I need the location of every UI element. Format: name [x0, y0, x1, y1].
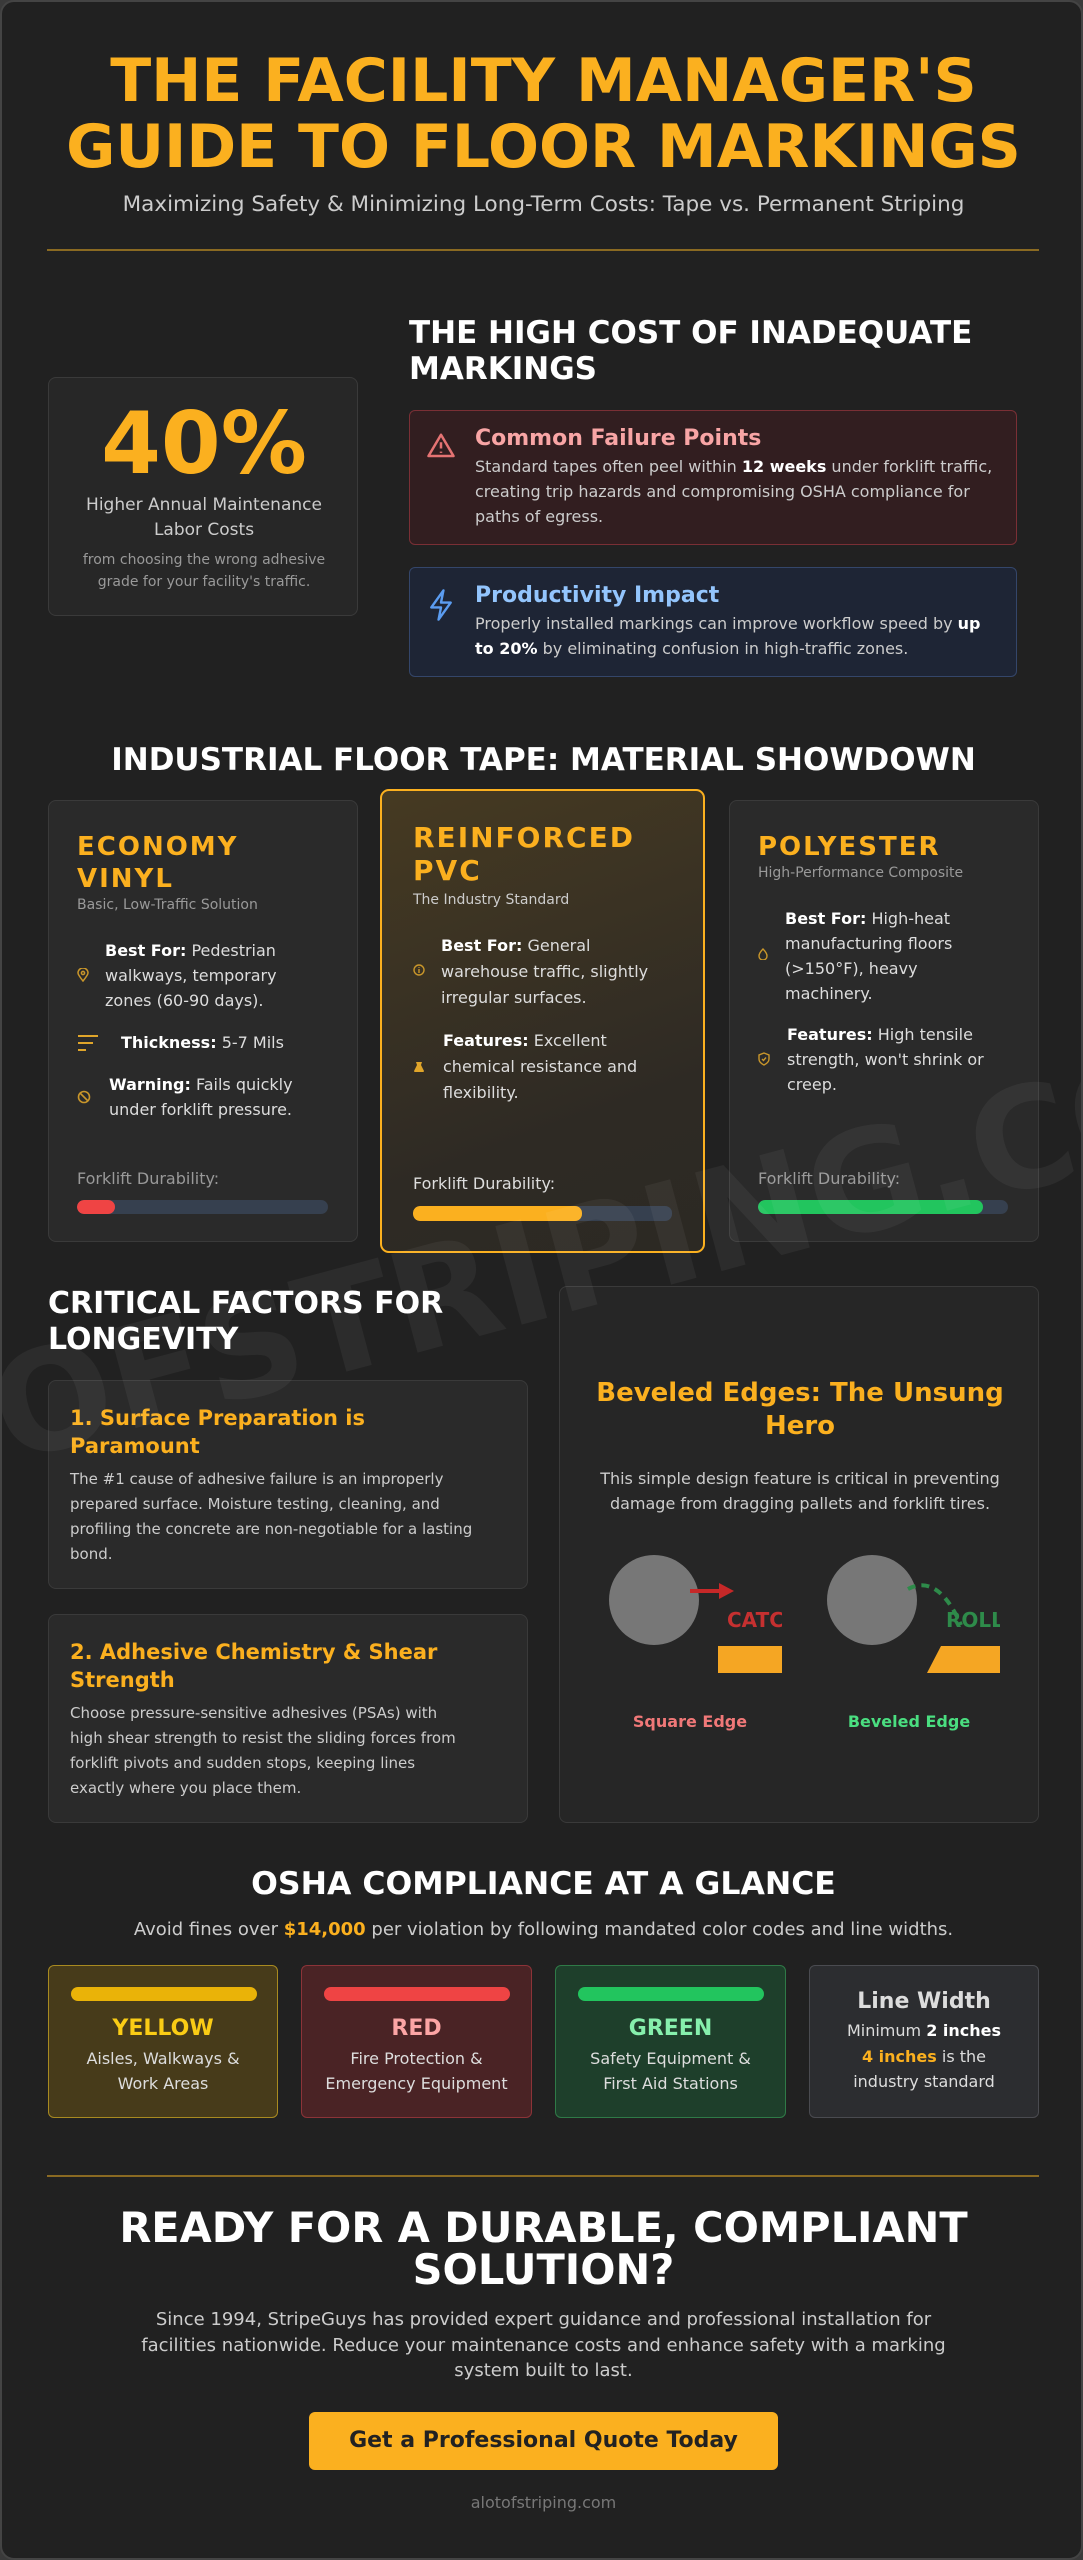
panel title	[596, 1378, 1004, 1441]
color code: green: GREEN	[629, 2016, 712, 2041]
item: features: Features: Excellent	[443, 1031, 607, 1050]
color code: yellow: Work Areas	[118, 2074, 208, 2093]
item: features: chemical resistance and	[443, 1057, 637, 1076]
item: features: flexibility.	[443, 1083, 519, 1102]
factor text: forklift pivots and sudden stops, keeping lines	[70, 1754, 415, 1772]
panel: economy vinyl	[48, 800, 358, 1242]
title: GUIDE TO FLOOR MARKINGS	[66, 112, 1021, 182]
beveled edge	[827, 1555, 1004, 1673]
panel: surface preparation	[48, 1380, 528, 1589]
button: Get a Professional Quote Today	[349, 2428, 738, 2453]
durability label: Forklift Durability:	[758, 1169, 900, 1188]
color code: yellow	[48, 1965, 278, 2118]
panel: adhesive chemistry	[48, 1614, 528, 1823]
card title: POLYESTER	[758, 832, 941, 862]
card subtitle: Basic, Low-Traffic Solution	[77, 897, 258, 913]
label: beveled edge: Beveled Edge	[848, 1712, 970, 1731]
callout: productivity impact	[409, 567, 1017, 677]
card title: ECONOMY	[77, 832, 239, 862]
heading: high cost: THE HIGH COST OF INADEQUATE	[409, 315, 972, 351]
heading: call to action: SOLUTION?	[413, 2245, 674, 2294]
item: best for	[758, 909, 952, 1003]
heading: critical factors	[48, 1286, 443, 1357]
panel: reinforced pvc	[380, 789, 705, 1253]
stat label	[86, 495, 322, 540]
square edge	[609, 1555, 801, 1673]
item: features: strength, won't shrink or	[787, 1050, 984, 1069]
card title: REINFORCED	[413, 821, 635, 854]
callout title: Productivity Impact	[475, 583, 719, 608]
color code: green: Safety Equipment &	[590, 2049, 751, 2068]
card title: PVC	[413, 854, 482, 887]
diagram: square vs beveled edge	[609, 1555, 1004, 1673]
color code: green: First Aid Stations	[603, 2074, 738, 2093]
stat note	[83, 552, 325, 590]
durability label: Forklift Durability:	[77, 1169, 219, 1188]
factor text: The #1 cause of adhesive failure is an improperly	[70, 1470, 443, 1488]
item: best for	[413, 936, 648, 1007]
title	[66, 46, 1021, 182]
item: warning	[78, 1075, 293, 1119]
factor title	[70, 1640, 438, 1692]
item: warning: Warning: Fails quickly	[109, 1075, 293, 1094]
factor title: 1. Surface Preparation is	[70, 1406, 365, 1430]
title: THE FACILITY MANAGER'S	[110, 46, 977, 116]
factor text: prepared surface. Moisture testing, cleaning, and	[70, 1495, 440, 1513]
panel: beveled edges	[559, 1286, 1039, 1823]
callout text: creating trip hazards and compromising OSHA compliance for	[475, 482, 970, 501]
item: best for: Best For: General	[441, 936, 590, 955]
heading: high cost	[409, 315, 972, 387]
panel: polyester	[729, 800, 1039, 1242]
stat number: 40%	[101, 394, 307, 494]
factor title: Paramount	[70, 1434, 200, 1458]
callout text	[475, 614, 980, 658]
cta text: facilities nationwide. Reduce your maintenance costs and enhance safety with a marking	[141, 2334, 946, 2356]
card title	[77, 832, 239, 894]
factor text: bond.	[70, 1545, 112, 1563]
stat note: grade for your facility's traffic.	[98, 574, 310, 590]
stat label: Higher Annual Maintenance	[86, 495, 322, 515]
item: best for: (>150°F), heavy	[785, 959, 918, 978]
line width box: Minimum 2 inches	[847, 2021, 1001, 2040]
item: best for: irregular surfaces.	[441, 988, 587, 1007]
factor text: high shear strength to resist the sliding forces from	[70, 1729, 456, 1747]
panel text	[600, 1469, 1000, 1513]
factor title	[70, 1406, 365, 1458]
callout text: paths of egress.	[475, 507, 603, 526]
stat card: 40%	[48, 377, 358, 616]
factor text: profiling the concrete are non-negotiable for a lasting	[70, 1520, 472, 1538]
card title: VINYL	[77, 864, 174, 894]
subtitle: Maximizing Safety & Minimizing Long-Term Costs: Tape vs. Permanent Striping	[123, 192, 964, 217]
panel text: damage from dragging pallets and forklift tires.	[610, 1494, 990, 1513]
item: best for: Best For: High-heat	[785, 909, 950, 928]
callout text: Properly installed markings can improve workflow speed by up	[475, 614, 980, 633]
callout: common failure points	[409, 410, 1017, 545]
heading: osha: OSHA COMPLIANCE AT A GLANCE	[251, 1866, 836, 1902]
item: features: creep.	[787, 1075, 837, 1094]
item: thickness: Thickness: 5-7 Mils	[121, 1033, 284, 1052]
button	[309, 2412, 778, 2470]
cta text	[141, 2309, 946, 2381]
line width box: Line Width	[857, 1989, 991, 2014]
color code: red: Fire Protection &	[350, 2049, 483, 2068]
factor text: exactly where you place them.	[70, 1779, 301, 1797]
heading: high cost: MARKINGS	[409, 351, 597, 387]
item: best for: manufacturing floors	[785, 934, 952, 953]
durability bar	[77, 1200, 328, 1214]
panel title: Hero	[765, 1411, 835, 1441]
color code: red: RED	[391, 2016, 442, 2041]
heading: material showdown: INDUSTRIAL FLOOR TAPE: MATERIAL SHOWDOWN	[111, 742, 976, 778]
color code: red: Emergency Equipment	[325, 2074, 508, 2093]
label: square edge: Square Edge	[633, 1712, 747, 1731]
line width box	[809, 1965, 1039, 2118]
icon: lightning	[430, 589, 452, 621]
callout text	[475, 457, 992, 526]
item: best for: zones (60-90 days).	[105, 991, 264, 1010]
icon: warning	[427, 434, 455, 458]
factor title: Strength	[70, 1668, 175, 1692]
card title	[413, 821, 635, 887]
item: best for: warehouse traffic, slightly	[441, 962, 648, 981]
item: best for: machinery.	[785, 984, 873, 1003]
heading: critical factors: LONGEVITY	[48, 1322, 238, 1357]
item: best for: Best For: Pedestrian	[105, 941, 276, 960]
durability bar	[413, 1206, 672, 1221]
beveled edge: ROLL	[946, 1608, 1004, 1632]
card subtitle: The Industry Standard	[413, 892, 569, 908]
color code: yellow: YELLOW	[112, 2016, 214, 2041]
callout text: to 20% by eliminating confusion in high-traffic zones.	[475, 639, 908, 658]
item: best for: walkways, temporary	[105, 966, 277, 985]
osha subtitle: Avoid fines over $14,000 per violation by following mandated color codes and line widths.	[134, 1919, 953, 1940]
item: features	[414, 1031, 637, 1102]
durability bar	[758, 1200, 1008, 1214]
color code: yellow: Aisles, Walkways &	[86, 2049, 240, 2068]
cta text: system built to last.	[454, 2360, 633, 2381]
panel text: This simple design feature is critical in preventing	[600, 1469, 1000, 1488]
item: best for	[77, 941, 277, 1010]
color code: green	[555, 1965, 786, 2118]
item: warning: under forklift pressure.	[109, 1100, 292, 1119]
panel title: Beveled Edges: The Unsung	[596, 1378, 1004, 1408]
factor text	[70, 1470, 472, 1563]
heading: critical factors: CRITICAL FACTORS FOR	[48, 1286, 443, 1321]
factor text: Choose pressure-sensitive adhesives (PSAs) with	[70, 1704, 437, 1722]
color code: red	[301, 1965, 532, 2118]
callout title: Common Failure Points	[475, 426, 761, 451]
durability label: Forklift Durability:	[413, 1174, 555, 1193]
line width box: industry standard	[853, 2072, 995, 2091]
cta text: Since 1994, StripeGuys has provided expert guidance and professional installation for	[156, 2309, 931, 2330]
factor title: 2. Adhesive Chemistry & Shear	[70, 1640, 437, 1664]
square edge: CATCH	[727, 1608, 801, 1632]
stat label: Labor Costs	[154, 520, 254, 540]
callout text: Standard tapes often peel within 12 weeks under forklift traffic,	[475, 457, 992, 476]
heading: call to action: READY FOR A DURABLE, COMPLIANT	[119, 2203, 968, 2252]
stat note: from choosing the wrong adhesive	[83, 552, 325, 568]
line width box: 4 inches is the	[862, 2046, 986, 2066]
item: features: Features: High tensile	[787, 1025, 973, 1044]
factor text	[70, 1704, 456, 1797]
item: features	[758, 1025, 984, 1094]
footer url: alotofstriping.com	[471, 2493, 616, 2512]
heading: call to action	[119, 2203, 968, 2294]
card subtitle: High-Performance Composite	[758, 865, 963, 881]
